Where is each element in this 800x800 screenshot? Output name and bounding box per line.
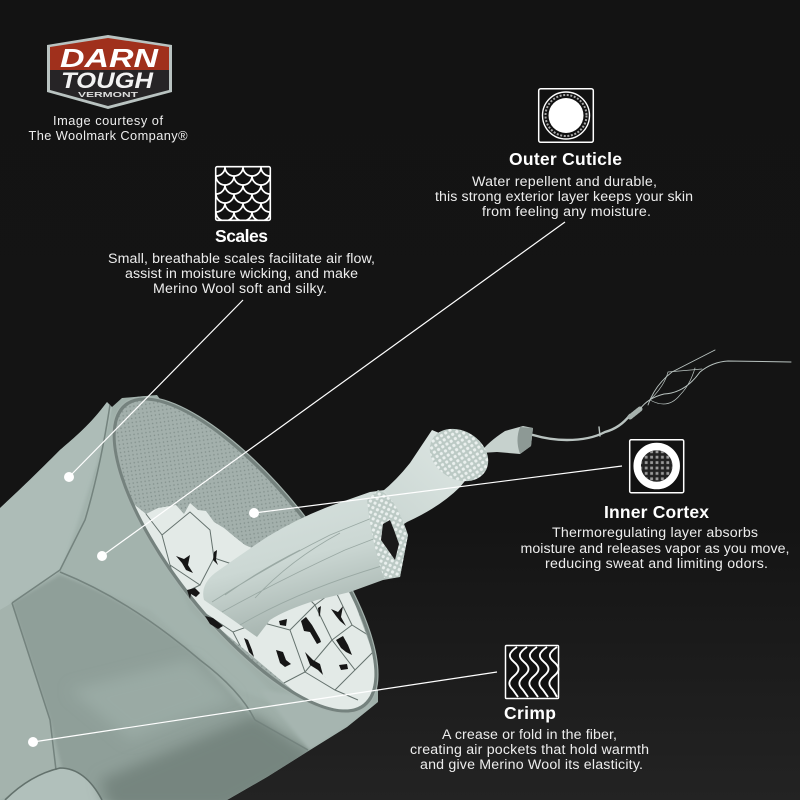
panel: crimp: [410, 646, 649, 773]
logo: Darn Tough Vermont: DARN: [60, 43, 160, 73]
description: inner cortex: reducing sweat and limiting odors.: [545, 556, 768, 572]
large fiber striations: [212, 518, 385, 625]
description: crimp: A crease or fold in the fiber,: [442, 727, 617, 743]
icon: outer cuticle: [539, 89, 593, 142]
description: crimp: [410, 727, 649, 773]
description: inner cortex: [520, 525, 790, 572]
leader line: inner cortex: [249, 466, 622, 518]
logo: Darn Tough Vermont: [47, 35, 172, 109]
heading: outer cuticle: Outer Cuticle: [509, 149, 622, 169]
heading: scales: Scales: [215, 226, 268, 246]
icon: scales: [214, 166, 272, 222]
description: scales: assist in moisture wicking, and make: [125, 266, 358, 282]
description: inner cortex: moisture and releases vapor as you move,: [520, 541, 790, 557]
fine strands: [533, 350, 791, 440]
large fiber hollow: [381, 520, 399, 560]
logo: Darn Tough Vermont: VERMONT: [78, 92, 139, 99]
description: crimp: creating air pockets that hold warmth: [410, 742, 649, 758]
large fiber end cap: [367, 490, 408, 578]
fiber outer body: [0, 395, 378, 800]
wool fiber illustration: [0, 350, 791, 800]
panel: inner cortex: [520, 440, 790, 572]
description: outer cuticle: this strong exterior layer keeps your skin: [435, 189, 693, 205]
leader line: crimp: [28, 672, 497, 747]
description: inner cortex: Thermoregulating layer absorbs: [552, 525, 758, 541]
description: scales: Small, breathable scales facilitate air flow,: [108, 251, 375, 267]
leader line: outer cuticle: [97, 222, 565, 561]
medium fiber: [378, 430, 487, 530]
image credit: Image courtesy of: [53, 113, 163, 128]
cut face dotted cortex area: [74, 365, 416, 745]
description: crimp: and give Merino Wool its elasticity.: [420, 757, 643, 773]
cut face rim: [69, 359, 421, 751]
leader line: scales: [64, 300, 243, 482]
icon: inner cortex: [630, 440, 684, 493]
description: scales: [108, 251, 375, 297]
logo: Darn Tough Vermont: TOUGH: [61, 68, 154, 93]
medium fiber cap: [420, 418, 498, 492]
image credit line 2: The Woolmark Company®: [28, 128, 188, 143]
small fiber: [480, 426, 533, 454]
description: outer cuticle: [435, 174, 693, 220]
fiber lumens: [176, 550, 352, 678]
icon: crimp: [506, 646, 558, 698]
small fiber cap: [518, 427, 533, 454]
description: scales: Merino Wool soft and silky.: [153, 281, 327, 297]
heading: crimp: Crimp: [504, 703, 556, 723]
large inner fiber: [203, 490, 408, 637]
description: outer cuticle: from feeling any moisture.: [482, 204, 651, 220]
panel: outer cuticle: [435, 89, 693, 220]
description: outer cuticle: Water repellent and durable,: [472, 174, 657, 190]
panel: scales: [108, 167, 375, 297]
cut face cells: [135, 503, 374, 710]
heading: inner cortex: Inner Cortex: [604, 502, 709, 522]
